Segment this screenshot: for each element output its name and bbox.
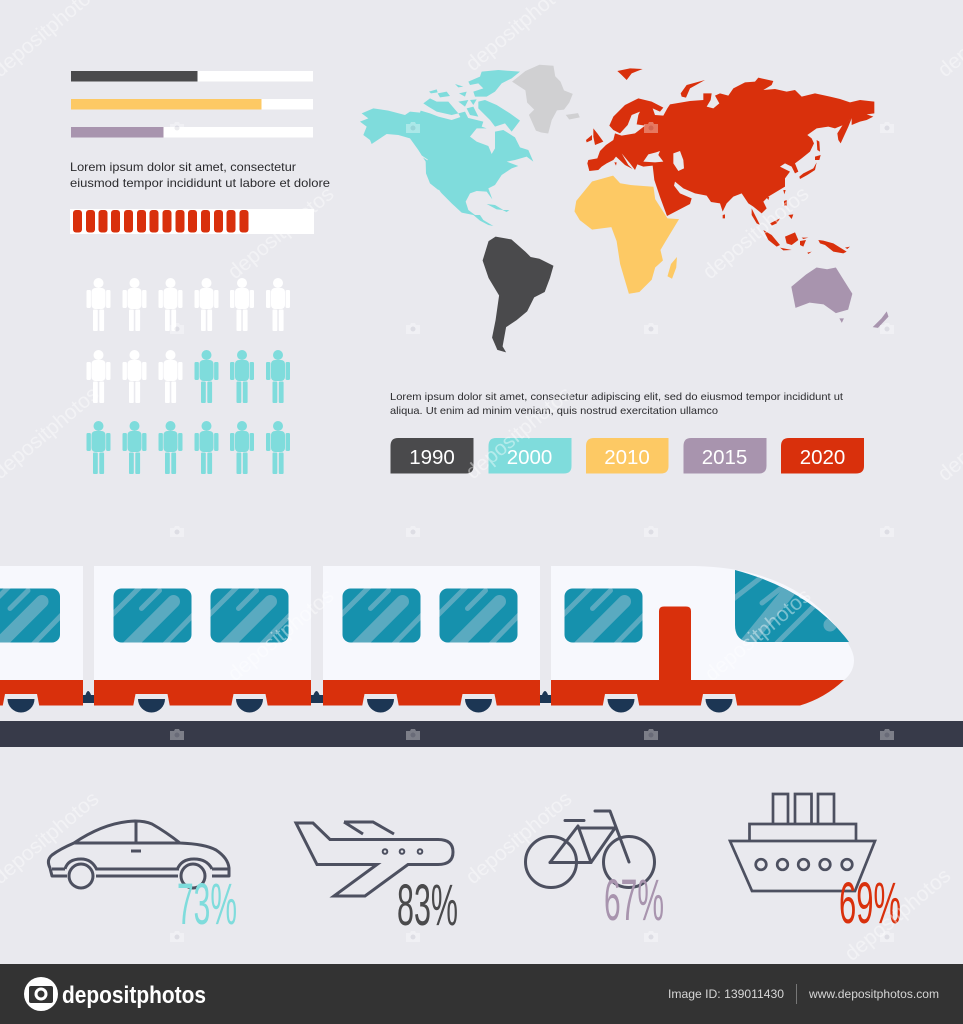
text block: left caption: Lorem ipsum dolor sit amet, consectetur: [70, 160, 296, 174]
segmented progress bar: [70, 209, 314, 234]
map: north america: [360, 70, 533, 226]
pictogram: people row 1: [86, 278, 290, 331]
tag: 2020: [781, 438, 864, 474]
text block: left caption: [70, 160, 330, 190]
train car: third: [323, 566, 540, 712]
train car: second: [94, 566, 311, 712]
text block: left caption: eiusmod tempor incididunt ut labore et dolore: [70, 176, 330, 190]
text block: map caption: [390, 391, 843, 417]
pictogram: people row 3: [86, 421, 290, 474]
timeline year tags: [390, 438, 864, 474]
icon: car: [48, 821, 229, 888]
couplers: [83, 691, 551, 703]
stat: 83%: 83%: [397, 873, 458, 938]
watermark camera marks: [170, 122, 894, 942]
tag: 2020: 2020: [800, 446, 845, 469]
train: [0, 566, 854, 712]
icon: ship: [730, 794, 875, 891]
watermarks: depositphotos: [223, 584, 338, 686]
watermarks: depositphotos: [840, 864, 955, 966]
panel: progress bars: [71, 71, 313, 138]
footer logo icon: [24, 977, 58, 1011]
text block: map caption: aliqua. Ut enim ad minim veniam, quis nostrud exercitation ullamco: [390, 405, 718, 417]
tag: 1990: [390, 438, 474, 474]
tag: 1990: 1990: [409, 446, 455, 469]
map: greenland: [512, 65, 580, 133]
tag: 2015: 2015: [702, 446, 747, 469]
footer logo wordmark: depositphotos: [62, 982, 206, 1009]
train car: rear: [0, 566, 83, 712]
train car: locomotive: [551, 566, 854, 712]
map: south america: [483, 237, 553, 352]
tag: 2015: [684, 438, 766, 474]
tag: 2010: 2010: [604, 446, 650, 469]
watermarks: depositphotos: [461, 787, 576, 889]
map: inland seas: [643, 151, 684, 171]
footer image id: Image ID: 139011430: [668, 987, 784, 1001]
text block: map caption: Lorem ipsum dolor sit amet, consectetur adipiscing elit, sed do eiusmod tempor incididunt ut: [390, 391, 843, 403]
watermarks: depositphotos: [698, 182, 813, 284]
watermarks: depositphotos: [461, 382, 576, 484]
world map: [360, 65, 888, 352]
icon: bicycle: [526, 811, 654, 888]
footer url: www.depositphotos.com: [808, 987, 939, 1001]
stat: 69%: 69%: [839, 871, 901, 936]
map: africa: [575, 176, 679, 294]
tag: 2000: 2000: [507, 446, 552, 469]
stat: 67%: 67%: [604, 868, 664, 933]
tag: 2000: [488, 438, 572, 474]
footer bar: [0, 964, 963, 1024]
pictogram: people row 2: [86, 350, 290, 403]
map: eurasia: [586, 68, 874, 254]
stat: 73%: 73%: [177, 872, 237, 937]
watermarks: depositphotos: [223, 182, 338, 284]
icon: airplane: [296, 822, 453, 896]
railway track: [0, 721, 963, 747]
tag: 2010: [586, 438, 668, 474]
map: oceania: [791, 267, 888, 328]
watermarks: depositphotos: [700, 584, 815, 686]
